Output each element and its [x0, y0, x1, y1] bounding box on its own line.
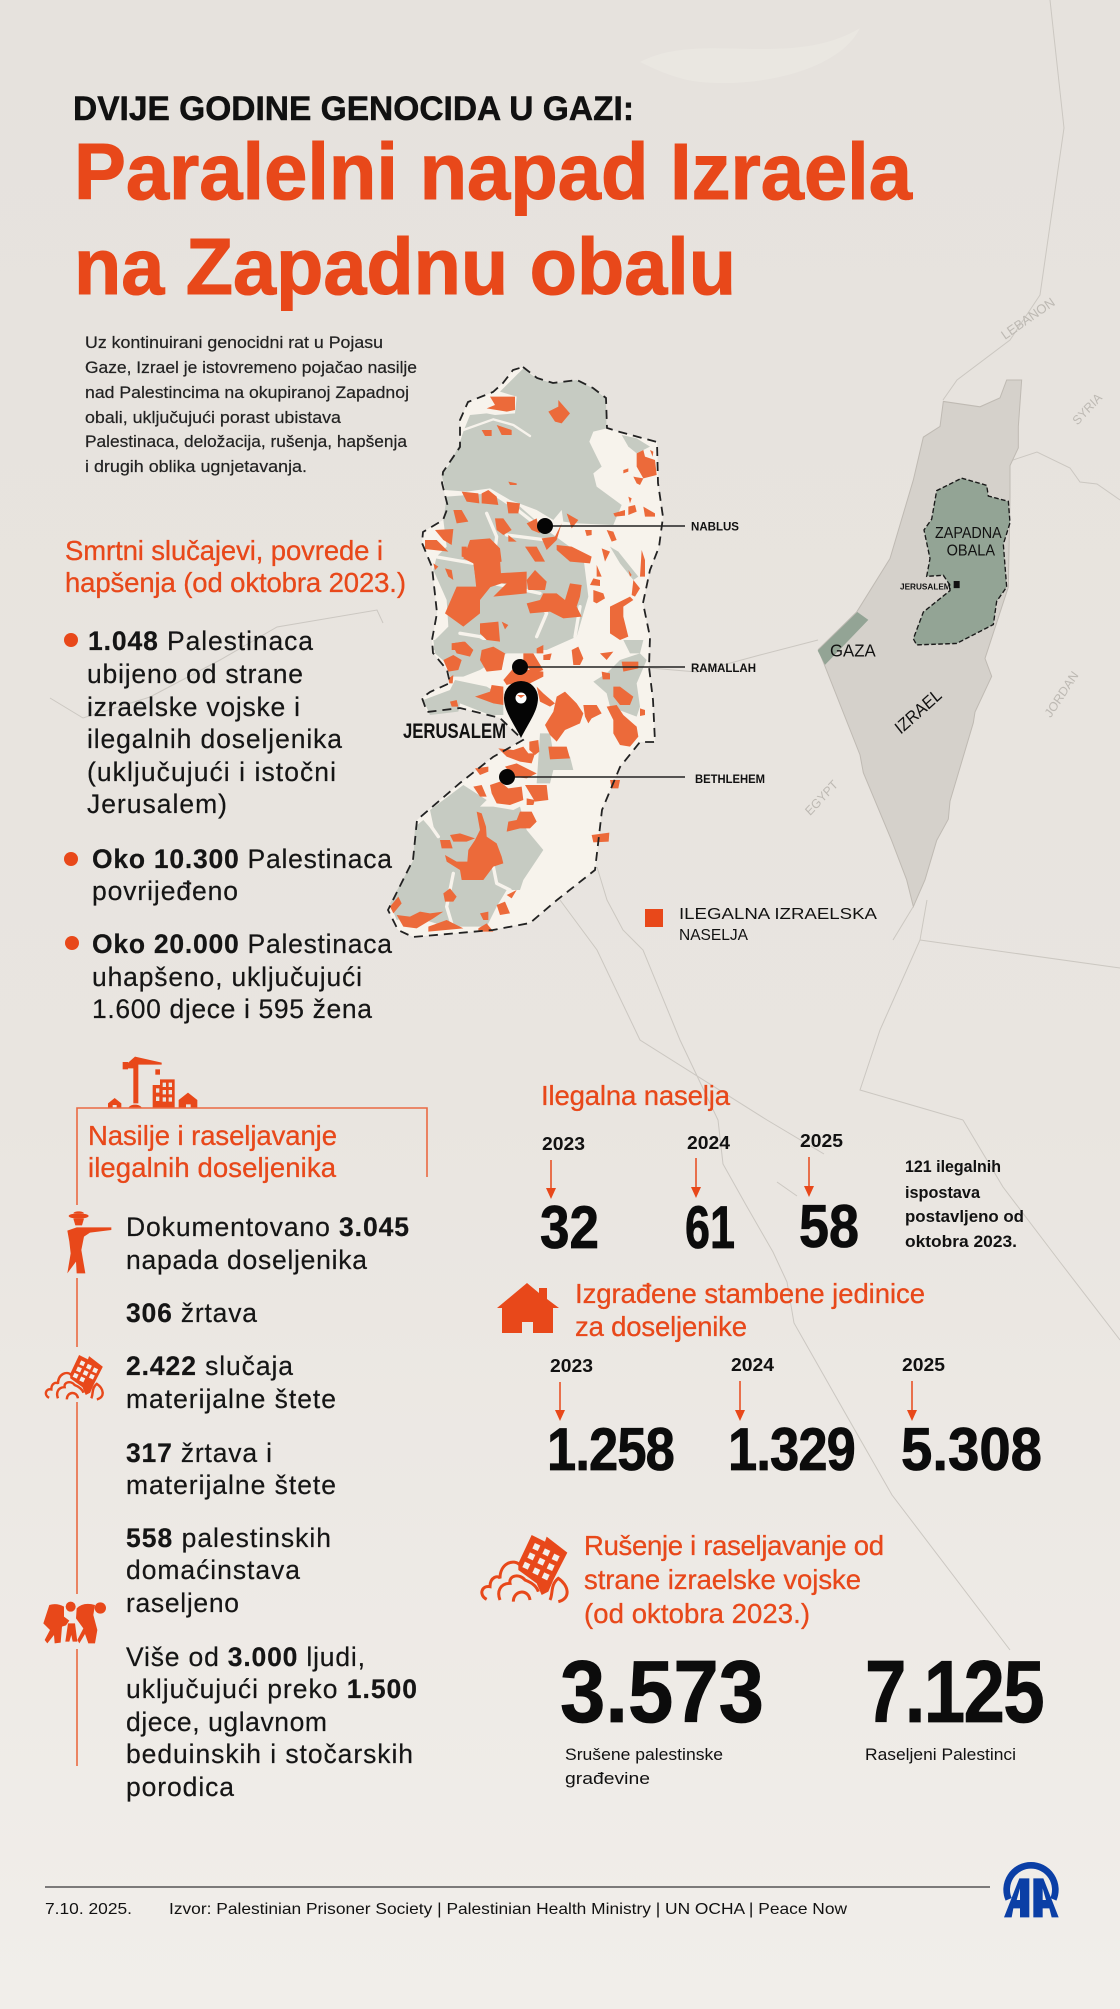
item: victims and damage: 317 žrtava i — [126, 1438, 272, 1468]
bullet: killed: ubijeno od strane — [87, 659, 303, 689]
heading — [575, 1278, 925, 1342]
settlements north — [425, 397, 657, 650]
label: Zapadna: ZAPADNA — [935, 524, 1002, 542]
bullet: arrested: uhapšeno, uključujući — [92, 962, 362, 992]
marker: Jerusalem pin — [403, 681, 538, 743]
icon: collapsing building — [482, 1535, 567, 1602]
bullet: killed: izraelske vojske i — [87, 692, 300, 722]
2023 value: 2023 — [542, 1134, 585, 1154]
bullet: arrested — [65, 929, 392, 1024]
icon: displaced family — [43, 1602, 106, 1643]
item: victims and damage — [126, 1438, 336, 1500]
marker: Nablus: NABLUS — [691, 522, 739, 534]
bullet: killed: 1.048 Palestinaca — [88, 626, 313, 656]
bullet: arrested: Oko 20.000 Palestinaca — [92, 929, 392, 959]
figure: demolished structures: građevine — [565, 1769, 650, 1788]
heading: hapšenja (od oktobra 2023.) — [65, 567, 406, 598]
intro text: Gaze, Izrael je istovremeno pojačao nasilje — [85, 358, 417, 377]
marker: Jerusalem pin: JERUSALEM — [403, 720, 506, 743]
item: material damage: materijalne štete — [126, 1384, 336, 1414]
label: Izrael: IZRAEL — [891, 684, 946, 738]
West Bank locator — [913, 478, 1010, 645]
bullet: injured: povrijeđeno — [92, 876, 238, 906]
title — [73, 90, 912, 311]
heading: (od oktobra 2023.) — [584, 1598, 810, 1629]
2024 value — [728, 1355, 855, 1483]
green areas north — [433, 368, 650, 650]
green areas south — [390, 640, 647, 927]
intro text: nad Palestincima na okupiranoj Zapadnoj — [85, 383, 409, 402]
West Bank map — [388, 367, 663, 937]
figure: demolished structures: 3.573 — [560, 1642, 764, 1741]
heading: za doseljenike — [575, 1311, 747, 1342]
map legend: ILEGALNA IZRAELSKA — [679, 906, 877, 923]
section: illegal settlements — [540, 1080, 1024, 1261]
2025 value: 5.308 — [901, 1416, 1042, 1483]
label: Jordan: JORDAN — [1042, 669, 1081, 720]
heading: Smrtni slučajevi, povrede i — [65, 535, 383, 566]
item: victims and damage: materijalne štete — [126, 1470, 336, 1500]
intro text: obali, uključujući porast ubistava — [85, 408, 342, 427]
2025 value: 2025 — [800, 1131, 843, 1151]
item: people displaced — [126, 1642, 417, 1802]
label: Syria: SYRIA — [1070, 390, 1105, 428]
heading: Ilegalna naselja — [541, 1080, 731, 1111]
section: settler violence — [43, 1057, 427, 1802]
heading: ilegalnih doseljenika — [88, 1152, 337, 1183]
heading — [88, 1120, 337, 1183]
figure: demolished structures — [560, 1642, 764, 1788]
bullet: killed: ilegalnih doseljenika — [87, 724, 342, 754]
item: people displaced: beduinskih i stočarskih — [126, 1739, 413, 1769]
item: victims: 306 žrtava — [126, 1298, 257, 1328]
Jerusalem marker — [954, 581, 960, 588]
item: people displaced: djece, uglavnom — [126, 1707, 327, 1737]
bullet: killed: Jerusalem) — [87, 789, 227, 819]
bullet: injured — [64, 844, 392, 906]
figure: demolished structures: Srušene palestinske — [565, 1745, 723, 1764]
note: outposts: oktobra 2023. — [905, 1232, 1017, 1251]
item: attacks: napada doseljenika — [126, 1245, 367, 1275]
locator map of Israel and Palestine — [802, 380, 1105, 907]
item: households displaced: 558 palestinskih — [126, 1523, 331, 1553]
title line 3: na Zapadnu obalu — [74, 222, 736, 311]
section: demolition and displacement — [482, 1530, 1043, 1788]
section: deaths, injuries, arrests — [64, 535, 406, 1024]
icon: damaged building — [46, 1355, 103, 1399]
2023 value: 32 — [540, 1194, 599, 1261]
label: Obala: OBALA — [947, 542, 996, 560]
item: attacks — [126, 1212, 409, 1275]
item: households displaced: domaćinstava — [126, 1555, 300, 1585]
marker: Nablus — [537, 518, 739, 534]
figure: displaced Palestinians: 7.125 — [865, 1642, 1043, 1741]
item: material damage — [126, 1351, 336, 1414]
date: 7.10. 2025. — [45, 1901, 132, 1918]
2025 value — [901, 1355, 1042, 1483]
2025 value: 2025 — [902, 1355, 945, 1375]
settlements south — [390, 642, 645, 932]
heading: strane izraelske vojske — [584, 1564, 861, 1595]
dashed border — [388, 367, 663, 937]
item: people displaced: uključujući preko 1.500 — [126, 1674, 417, 1704]
2024 value: 61 — [685, 1194, 735, 1261]
item: material damage: 2.422 slučaja — [126, 1351, 293, 1381]
marker: Ramallah: RAMALLAH — [691, 663, 756, 675]
Israel territory — [818, 380, 1022, 907]
heading — [584, 1530, 884, 1629]
bullet: killed — [64, 626, 342, 819]
label: Lebanon: LEBANON — [998, 295, 1058, 342]
2024 value — [685, 1133, 735, 1261]
section: housing units — [497, 1278, 1042, 1483]
title line 2: Paralelni napad Izraela — [74, 127, 912, 216]
2024 value: 2024 — [731, 1355, 774, 1375]
bullet: killed: (uključujući i istočni — [87, 757, 336, 787]
title line 1: DVIJE GODINE GENOCIDA U GAZI: — [73, 90, 634, 128]
territory outline — [388, 367, 663, 937]
label: Egypt: EGYPT — [802, 777, 841, 818]
item: households displaced — [126, 1523, 331, 1618]
figure: displaced Palestinians: Raseljeni Palestinci — [865, 1745, 1016, 1764]
heading: Rušenje i raseljavanje od — [584, 1530, 884, 1561]
intro text: i drugih oblika ugnjetavanja. — [85, 457, 307, 476]
label: Gaza: GAZA — [830, 640, 876, 661]
2023 value — [540, 1134, 599, 1261]
item: attacks: Dokumentovano 3.045 — [126, 1212, 409, 1242]
item: households displaced: raseljeno — [126, 1588, 239, 1618]
2023 value: 1.258 — [547, 1416, 674, 1483]
marker: Bethlehem — [499, 769, 765, 786]
note: outposts: postavljeno od — [905, 1207, 1024, 1226]
map legend: NASELJA — [679, 927, 748, 944]
2024 value: 2024 — [687, 1133, 730, 1153]
intro text: Palestinaca, deložacija, rušenja, hapšenja — [85, 432, 408, 451]
icon: settler with rifle — [67, 1211, 111, 1273]
bullet: injured: Oko 10.300 Palestinaca — [92, 844, 392, 874]
label: Jerusalem small: JERUSALEM — [900, 582, 951, 592]
source: Izvor: Palestinian Prisoner Society | Palestinian Health Ministry | UN OCHA | Peace Now — [169, 1901, 847, 1918]
footer — [45, 1865, 1059, 1918]
bullet: arrested: 1.600 djece i 595 žena — [92, 994, 372, 1024]
2024 value: 1.329 — [728, 1416, 855, 1483]
2023 value — [547, 1356, 674, 1483]
marker: Ramallah — [512, 659, 756, 675]
heading: Izgrađene stambene jedinice — [575, 1278, 925, 1309]
intro text — [85, 333, 417, 476]
note: outposts: ispostava — [905, 1183, 981, 1202]
logo: AA — [1004, 1865, 1059, 1917]
map legend — [645, 906, 877, 944]
heading: Nasilje i raseljavanje — [88, 1120, 337, 1151]
2023 value: 2023 — [550, 1356, 593, 1376]
item: people displaced: Više od 3.000 ljudi, — [126, 1642, 365, 1672]
icon: house — [497, 1283, 559, 1333]
Gaza locator — [818, 612, 868, 665]
2025 value: 58 — [799, 1193, 859, 1260]
header frame — [77, 1108, 427, 1205]
intro text: Uz kontinuirani genocidni rat u Pojasu — [85, 333, 383, 352]
icon: crane and buildings — [108, 1057, 197, 1108]
2025 value — [799, 1131, 859, 1260]
item: people displaced: porodica — [126, 1772, 234, 1802]
note: outposts — [905, 1157, 1024, 1251]
marker: Bethlehem: BETHLEHEM — [695, 774, 765, 786]
timeline lines — [76, 1278, 78, 1766]
heading — [65, 535, 406, 598]
note: outposts: 121 ilegalnih — [905, 1157, 1001, 1176]
